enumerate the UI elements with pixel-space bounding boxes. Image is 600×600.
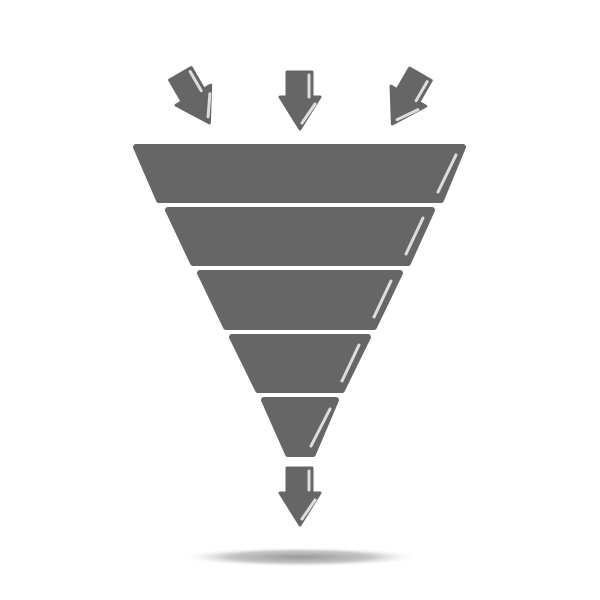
arrow: left top: [164, 64, 227, 133]
arrow: bottom output: [280, 468, 320, 525]
band highlights: [311, 155, 456, 446]
arrow: center top: [280, 72, 320, 129]
band 2: [168, 210, 432, 263]
band 1: [136, 147, 463, 200]
band 5: [264, 400, 336, 454]
shadow: [178, 547, 422, 567]
funnel bands: [136, 147, 463, 454]
band 4: [232, 337, 368, 390]
band 3: [200, 273, 400, 327]
arrow: right top: [375, 65, 438, 134]
